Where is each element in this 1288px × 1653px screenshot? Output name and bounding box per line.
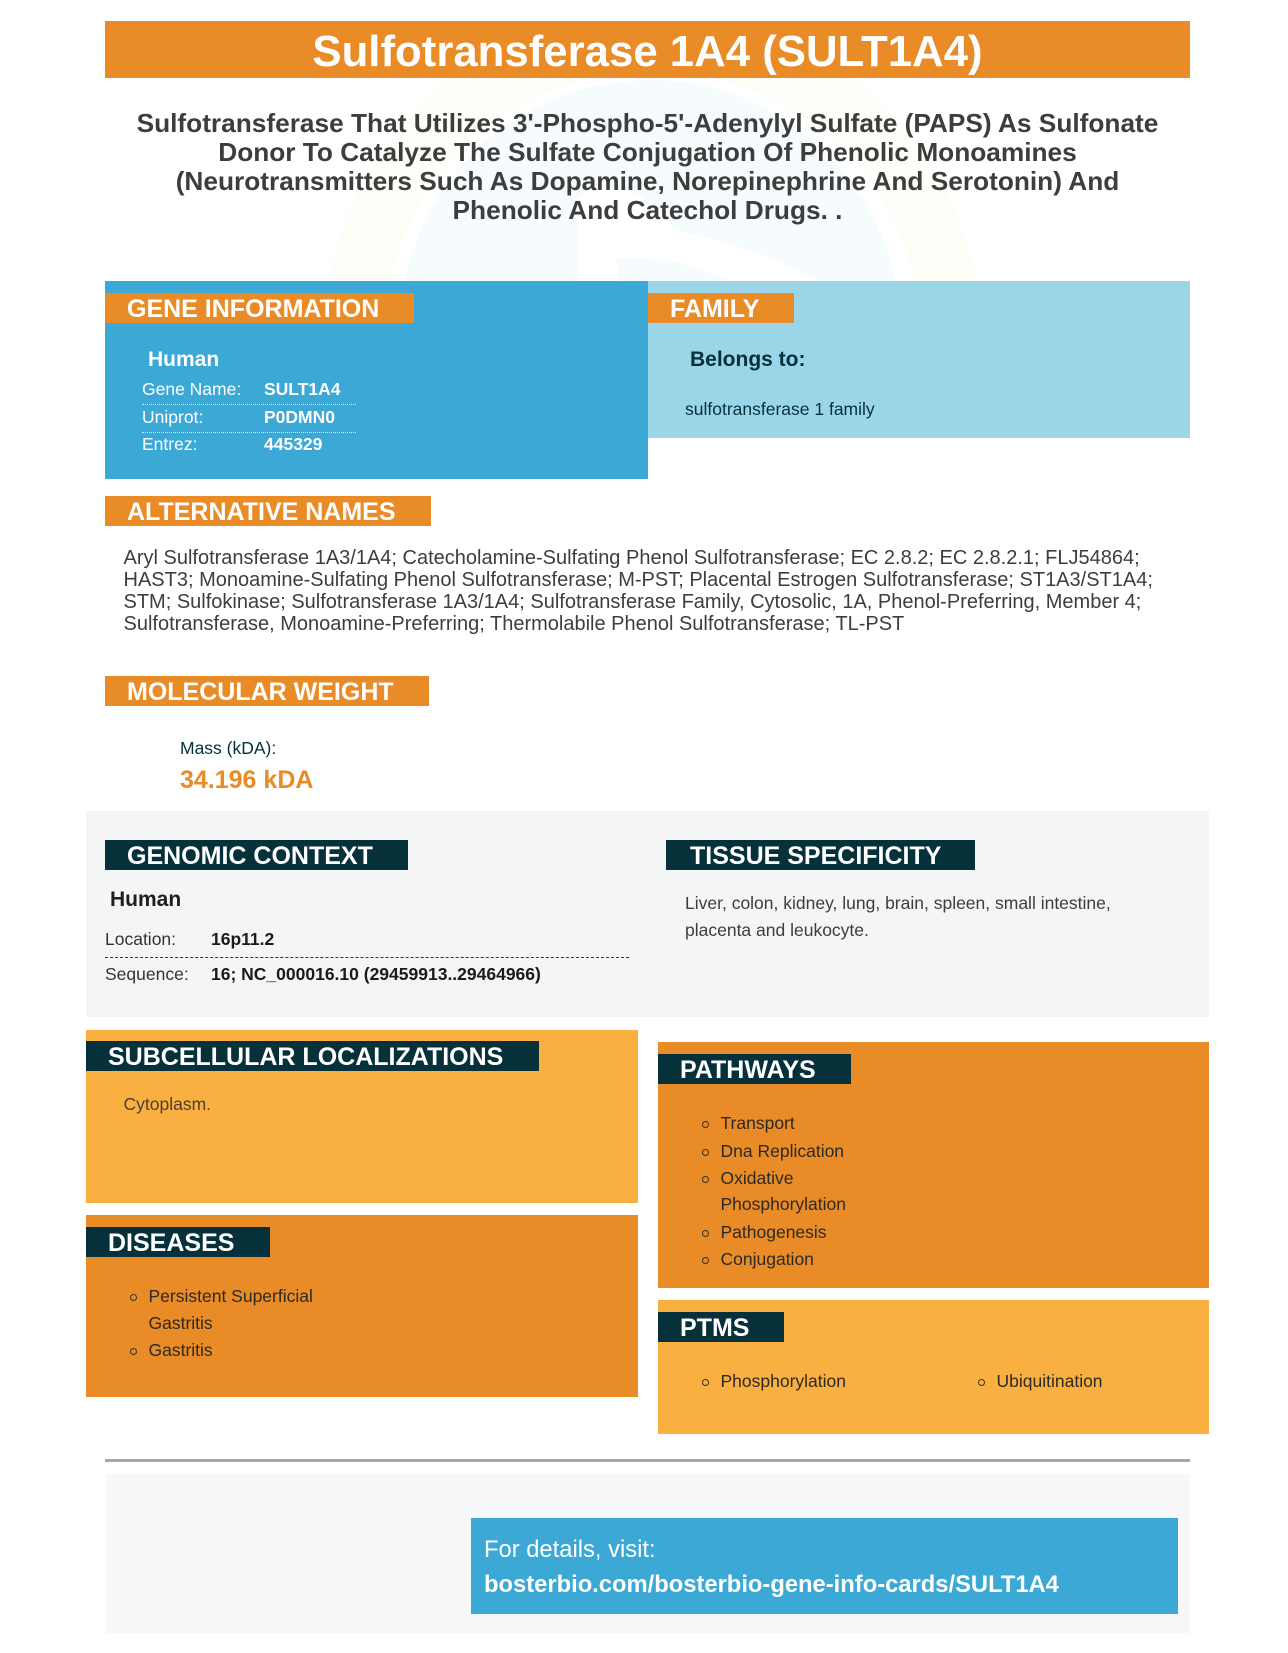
uniprot row [142,406,356,433]
uniprot row: P0DMN0 [264,407,335,427]
uniprot row: Uniprot: [142,407,203,427]
heading: pathways: PATHWAYS [680,1056,816,1084]
ptm list [702,1371,1103,1391]
disease list: Gastritis [148,1313,213,1333]
panel: footer [105,1474,1190,1633]
location row: Location: [105,929,176,949]
tissue text [685,893,1111,940]
panel: genomic context and tissue specificity [86,811,1209,1017]
heading: diseases [86,1227,270,1257]
disease list: Gastritis [148,1340,213,1360]
description: (Neurotransmitters Such As Dopamine, Norepinephrine And Serotonin) And [176,166,1119,196]
description: Sulfotransferase That Utilizes 3'-Phospho-5'-Adenylyl Sulfate (PAPS) As Sulfonate [137,108,1158,138]
panel: diseases [86,1215,638,1397]
alternative names text: Sulfotransferase, Monoamine-Preferring; Thermolabile Phenol Sulfotransferase; TL-PST [124,613,904,635]
heading: subcellular localizations: SUBCELLULAR LOCALIZATIONS [108,1043,503,1071]
heading: tissue specificity: TISSUE SPECIFICITY [690,842,941,870]
mass value: 34.196 kDA [180,766,313,794]
heading: ptms [658,1312,784,1342]
alternative names text: Aryl Sulfotransferase 1A3/1A4; Catecholamine-Sulfating Phenol Sulfotransferase; EC 2.8.2; EC 2.8.2.1; FLJ54864; [124,547,1140,569]
belongs to label: Belongs to: [690,348,806,371]
species label: Human [110,888,181,911]
gene name row: Gene Name: [142,379,241,399]
panel: pathways [658,1042,1209,1288]
tissue text: Liver, colon, kidney, lung, brain, spleen, small intestine, [685,893,1111,913]
ptm list: Ubiquitination [996,1371,1103,1391]
panel: subcellular localizations [86,1030,638,1203]
heading: genomic context: GENOMIC CONTEXT [127,842,373,870]
pathway list: Conjugation [720,1249,814,1269]
species label: Human [148,348,219,371]
gene name row: SULT1A4 [264,379,340,399]
pathway list: Transport [720,1113,795,1133]
visit label: For details, visit: [484,1536,656,1563]
alternative names text: STM; Sulfokinase; Sulfotransferase 1A3/1A4; Sulfotransferase Family, Cytosolic, 1A, Phenol-Preferring, Member 4; [124,591,1141,613]
heading: family [648,293,794,323]
disease list [130,1286,313,1360]
watermark logo [405,80,895,281]
panel: ptms [658,1300,1209,1434]
pathway list: Phosphorylation [720,1194,846,1214]
family text: sulfotransferase 1 family [685,399,875,419]
location row [105,929,274,949]
sequence row: Sequence: [105,964,189,984]
alternative names text: HAST3; Monoamine-Sulfating Phenol Sulfotransferase; M-PST; Placental Estrogen Sulfotransferase; ST1A3/ST1A4; [124,569,1153,591]
heading: alternative names: ALTERNATIVE NAMES [127,498,396,526]
description: Donor To Catalyze The Sulfate Conjugation Of Phenolic Monoamines [218,137,1077,167]
mass label: Mass (kDA): [180,738,276,758]
gene name row [142,378,356,405]
dashed divider [105,957,629,958]
pathway list [702,1113,846,1269]
panel: genomic context and tissue specificity: 16p11.2 [211,929,274,949]
localization text: Cytoplasm. [124,1094,211,1114]
heading: molecular weight: MOLECULAR WEIGHT [127,678,394,706]
pathway list: Pathogenesis [720,1222,827,1242]
heading: pathways [658,1054,851,1084]
description [137,108,1158,225]
disease list: Persistent Superficial [148,1286,313,1306]
heading: gene information: GENE INFORMATION [127,295,379,323]
heading: ptms: PTMS [680,1314,749,1342]
panel: genomic context and tissue specificity: 16; NC_000016.10 (29459913..29464966) [211,964,541,984]
description: Phenolic And Catechol Drugs. . [453,195,842,225]
callout: details link [471,1518,1178,1614]
sequence row [105,964,541,984]
entrez row [142,434,322,454]
heading: diseases: DISEASES [108,1229,234,1257]
panel: family [648,281,1190,438]
title [105,21,1190,78]
tissue text: placenta and leukocyte. [685,920,869,940]
pathway list: Dna Replication [720,1141,844,1161]
entrez row: 445329 [264,434,322,454]
alternative names text [124,547,1153,635]
url: bosterbio.com/bosterbio-gene-info-cards/SULT1A4 [484,1571,1059,1598]
heading: family: FAMILY [670,295,759,323]
title: Sulfotransferase 1A4 (SULT1A4) [312,27,983,76]
ptm list: Phosphorylation [720,1371,846,1391]
pathway list: Oxidative [720,1168,793,1188]
entrez row: Entrez: [142,434,197,454]
panel: gene information [105,281,648,479]
